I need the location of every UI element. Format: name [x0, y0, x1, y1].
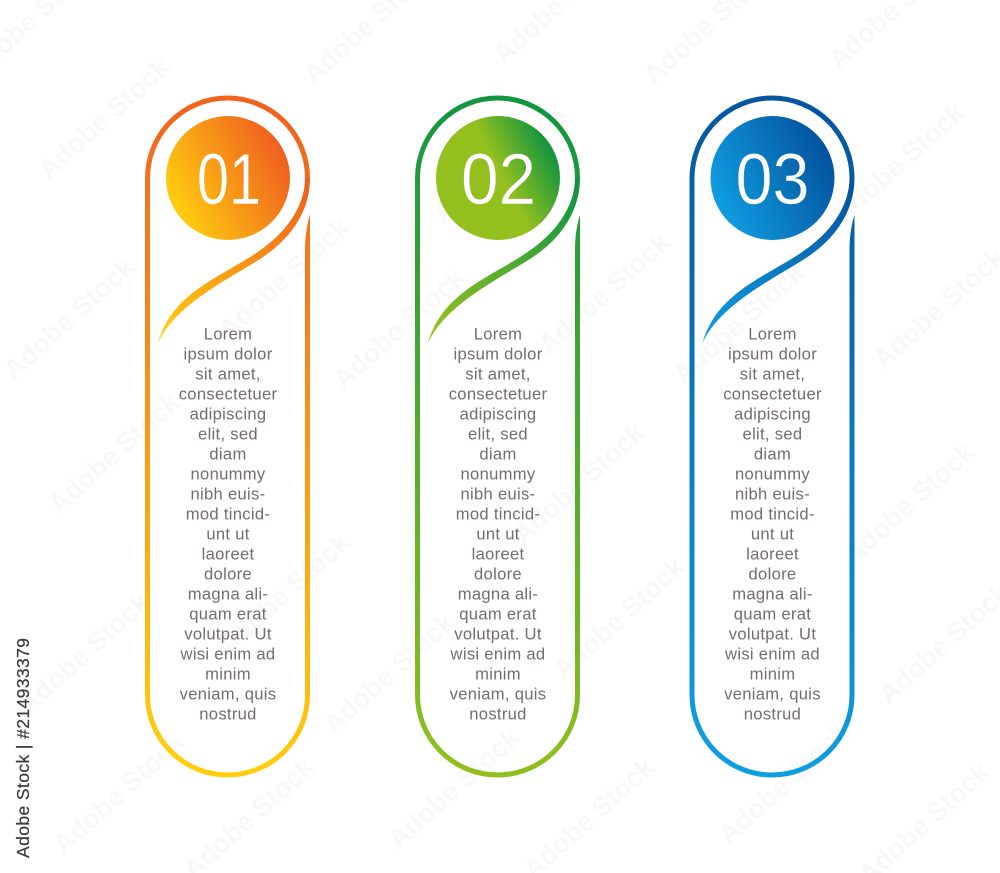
text block 03: nonummy [735, 464, 810, 484]
watermark pattern: Adobe Stock [213, 526, 356, 660]
outline: blue capsule [692, 98, 852, 775]
text block 02: minim [475, 664, 521, 684]
panel: step 02 green [418, 98, 580, 775]
text block 01: dolore [204, 564, 252, 584]
text block 03: consectetuer [723, 384, 822, 404]
number badge 01 [166, 116, 290, 240]
number badge 02: 02 [461, 140, 536, 220]
number badge 01: 01 [197, 140, 261, 220]
text block 02: veniam, quis [450, 684, 546, 704]
text block 03: laoreet [746, 544, 799, 564]
text block 02: adipiscing [460, 404, 536, 424]
text block 03: ipsum dolor [728, 344, 817, 364]
watermark pattern: Adobe Stock [713, 716, 856, 850]
text block 01: quam erat [189, 604, 267, 624]
text block 01: adipiscing [190, 404, 266, 424]
text block 03: sit amet, [740, 364, 805, 384]
text block 01: wisi enim ad [180, 644, 275, 664]
text block 03: quam erat [734, 604, 811, 624]
swoosh: right tapered line [305, 215, 310, 250]
watermark pattern: Adobe Stock [533, 226, 676, 360]
swoosh: right tapered line [575, 215, 580, 250]
watermark pattern: Adobe Stock [838, 436, 981, 570]
text block 03: elit, sed [743, 424, 802, 444]
text block 03: dolore [749, 564, 796, 584]
text block 01: nibh euis- [191, 484, 265, 504]
number badge 02 [436, 116, 560, 240]
text block 01: veniam, quis [180, 684, 276, 704]
text block 02: nonummy [461, 464, 536, 484]
text block 01: elit, sed [198, 424, 258, 444]
text block 03: veniam, quis [724, 684, 821, 704]
watermark pattern: Adobe Stock [48, 726, 191, 860]
text block 02: nostrud [469, 704, 527, 724]
outline: green capsule [418, 98, 578, 775]
text block 02: dolore [474, 564, 522, 584]
text block 02: volutpat. Ut [454, 624, 542, 644]
text block 01: diam [209, 444, 247, 464]
panel: step 03 blue [692, 98, 854, 775]
watermark pattern: Adobe Stock [213, 211, 356, 345]
text block 01: nonummy [191, 464, 266, 484]
text block 01: minim [205, 664, 251, 684]
text block 01: ipsum dolor [183, 344, 273, 364]
text block 02: wisi enim ad [450, 644, 545, 664]
text block 03: minim [750, 664, 795, 684]
swoosh: right tapered line [850, 215, 854, 250]
text block 03: diam [754, 444, 791, 464]
text block 02: magna ali- [458, 584, 538, 604]
watermark pattern: Adobe Stock [0, 251, 141, 385]
number badge 03 [710, 116, 834, 240]
text block 02: mod tincid- [456, 504, 540, 524]
number badge 03: 03 [736, 140, 810, 220]
text block 03: mod tincid- [730, 504, 815, 524]
watermark pattern: Adobe Stock [43, 386, 186, 520]
swoosh: curve [428, 178, 580, 343]
panel: step 01 orange [148, 98, 310, 775]
watermark pattern: Adobe Stock [668, 256, 811, 390]
text block 02: unt ut [476, 524, 520, 544]
swoosh: curve [702, 178, 854, 343]
text block 03: Lorem [748, 324, 797, 344]
swoosh: curve [158, 178, 310, 343]
watermark pattern: Adobe Stock [318, 606, 461, 740]
watermark pattern: Adobe Stock [508, 416, 651, 550]
text block 03: wisi enim ad [724, 644, 820, 664]
text block 01: mod tincid- [186, 504, 270, 524]
text block 02: quam erat [459, 604, 537, 624]
text block 02: nibh euis- [461, 484, 535, 504]
watermark pattern: Adobe Stock [428, 96, 571, 230]
watermark pattern: Adobe Stock [548, 551, 691, 685]
text block 01: consectetuer [179, 384, 277, 404]
text block 03: adipiscing [734, 404, 811, 424]
text block 03: volutpat. Ut [729, 624, 816, 644]
text block 01: magna ali- [188, 584, 268, 604]
text block 02: laoreet [472, 544, 525, 564]
text block 03: unt ut [751, 524, 794, 544]
text block 01: laoreet [202, 544, 255, 564]
text block 02: diam [479, 444, 517, 464]
text block 03: nostrud [744, 704, 801, 724]
watermark pattern: Adobe Stock [383, 721, 526, 855]
watermark pattern: Adobe Stock [13, 586, 156, 720]
text block 02: elit, sed [468, 424, 528, 444]
text block 01: Lorem [204, 324, 252, 344]
text block 01: unt ut [206, 524, 250, 544]
text block 02: consectetuer [449, 384, 547, 404]
stock credit: Adobe Stock | #214933379 [13, 638, 33, 858]
text block 03: magna ali- [732, 584, 813, 604]
text block 02: sit amet, [465, 364, 531, 384]
text block 03: nibh euis- [735, 484, 810, 504]
watermark pattern: Adobe Stock [328, 261, 471, 395]
watermark pattern: Adobe Stock [828, 96, 971, 230]
outline: orange capsule [148, 98, 308, 775]
text block 01: sit amet, [195, 364, 261, 384]
text block 02: Lorem [474, 324, 522, 344]
text block 01: nostrud [199, 704, 257, 724]
text block 01: volutpat. Ut [184, 624, 272, 644]
watermark pattern: Adobe Stock [33, 51, 176, 185]
text block 02: ipsum dolor [453, 344, 543, 364]
